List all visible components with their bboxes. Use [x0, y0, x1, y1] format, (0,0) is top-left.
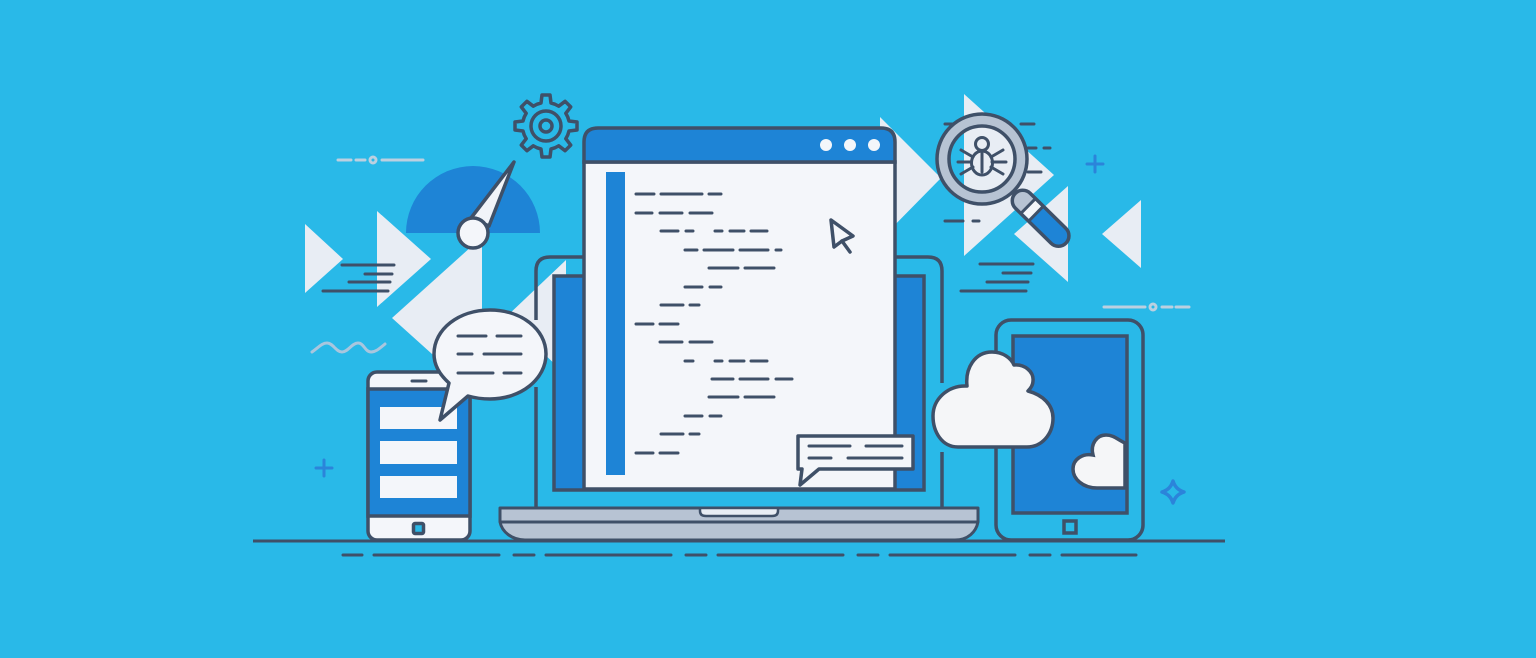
speed lines left [323, 265, 394, 291]
window title bar [584, 128, 895, 162]
magnifier ring [937, 114, 1027, 204]
laptop screen [554, 276, 924, 490]
code window [584, 128, 913, 489]
phone speaker [412, 380, 426, 382]
laptop [500, 257, 978, 540]
speech bubble [434, 310, 546, 420]
speed lines right [961, 264, 1033, 291]
large cloud [933, 352, 1053, 447]
sparkle icon [1162, 481, 1184, 503]
tablet screen [1013, 336, 1127, 513]
laptop base [500, 508, 978, 540]
magnifier handle [1008, 186, 1073, 251]
phone screen [368, 389, 470, 516]
slider accent left [338, 157, 423, 163]
base divider [500, 520, 978, 524]
icon: cursor [831, 220, 853, 252]
window controls [820, 139, 880, 151]
ground dashes [343, 554, 1136, 556]
laptop lid outline [536, 257, 942, 508]
window body [584, 162, 895, 489]
decorative triangles [305, 94, 1141, 399]
code lines [636, 194, 792, 453]
icon: gear [515, 95, 577, 157]
tablet body [996, 320, 1143, 540]
gauge [406, 162, 540, 248]
phone home button [414, 524, 424, 534]
phone list rows [380, 407, 457, 498]
bubble shape [434, 310, 546, 420]
tablet screen border [1013, 336, 1127, 513]
slider accent right [1104, 304, 1189, 310]
gauge hub [458, 218, 488, 248]
wave accent [312, 343, 385, 352]
small cloud [1073, 435, 1125, 488]
bug [958, 138, 1006, 175]
tablet home button [1064, 521, 1076, 533]
gauge dial [406, 166, 540, 233]
line number gutter [606, 172, 625, 475]
icon: magnifying glass with bug [937, 114, 1073, 251]
gauge needle [471, 162, 514, 226]
motion dashes by magnifier [945, 124, 1050, 221]
tablet [996, 320, 1143, 540]
bubble text lines [458, 336, 521, 373]
base notch [700, 508, 778, 516]
phone body [368, 372, 470, 540]
ground line [253, 540, 1225, 542]
smartphone [368, 372, 470, 540]
window comment bubble [798, 436, 913, 485]
plus icon right [1087, 156, 1103, 172]
plus icon left [316, 460, 332, 476]
